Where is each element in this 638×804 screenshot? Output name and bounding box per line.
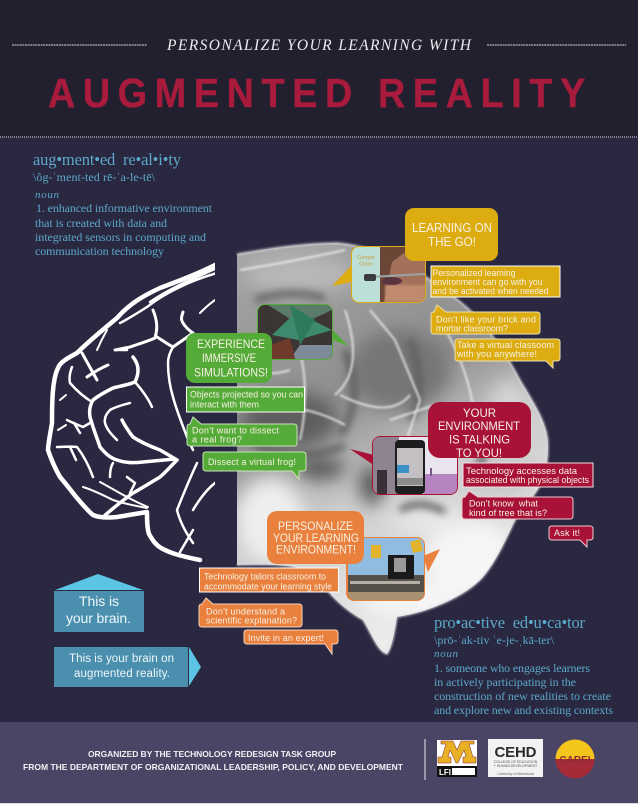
logo: University of Minnesota M: LFI bbox=[439, 768, 451, 777]
definition: proactive educator: pro•ac•tive ed•u•ca•tor bbox=[434, 613, 586, 632]
definition: augmented reality: noun bbox=[35, 189, 60, 201]
text: objects projected bbox=[186, 387, 304, 412]
definition: proactive educator: in actively participating in the bbox=[434, 675, 576, 689]
definition: augmented reality: 1. enhanced informative environment bbox=[36, 201, 213, 215]
definition: proactive educator: and explore new and existing contexts bbox=[434, 703, 613, 717]
definition: proactive educator bbox=[434, 613, 613, 717]
heading: your environment is talking to you: TO YOU! bbox=[456, 446, 502, 460]
heading: personalize your learning environment: ENVIRONMENT! bbox=[276, 542, 356, 556]
text: personalized learning: and be activated when needed bbox=[432, 286, 548, 296]
legend: this is your brain bbox=[54, 574, 144, 632]
text: personalized learning bbox=[431, 266, 560, 297]
logo: University of Minnesota M bbox=[437, 740, 477, 777]
text: objects projected: Objects projected so you can bbox=[190, 390, 303, 400]
speech bubble: virtual frog: Dissect a virtual frog! bbox=[208, 457, 296, 467]
text: personalized learning: environment can go with you bbox=[432, 277, 542, 287]
subtitle with rules: PERSONALIZE YOUR LEARNING WITH bbox=[166, 37, 472, 54]
speech bubble: ask it: Ask it! bbox=[554, 528, 580, 538]
body background bbox=[0, 137, 638, 722]
heading: learning on the go bbox=[405, 208, 498, 261]
logo: CEHD bbox=[488, 739, 543, 777]
heading: learning on the go: THE GO! bbox=[428, 235, 476, 249]
text: technology tailors classroom: accommodate your learning style bbox=[204, 582, 332, 592]
legend: this is your brain on augmented reality: This is your brain on bbox=[69, 653, 174, 665]
footer band bbox=[0, 722, 638, 804]
heading: personalize your learning environment bbox=[267, 511, 364, 564]
photographic brain bbox=[230, 235, 560, 660]
speech bubble: kind of tree: Don’t know what bbox=[469, 498, 538, 508]
heading: your environment is talking to you: IS TALKING bbox=[449, 432, 510, 446]
speech bubble: scientific explanation bbox=[199, 598, 302, 627]
heading: personalize your learning environment: YOUR LEARNING bbox=[273, 531, 359, 545]
image: virtual classroom with orange frame bbox=[346, 537, 440, 601]
heading: your environment is talking to you: YOUR bbox=[463, 406, 496, 420]
logo: CEHD: University of Minnesota bbox=[497, 772, 534, 776]
header band bbox=[0, 0, 638, 137]
image: phone with crimson frame bbox=[350, 436, 458, 495]
footer credit text bbox=[23, 749, 404, 772]
speech bubble: scientific explanation: Don’t understand a bbox=[206, 606, 285, 616]
definition: augmented reality: \ôg-ˈment-ted rē-ˈa-le-tē\ bbox=[33, 170, 156, 184]
text: technology accesses data: associated with physical objects bbox=[466, 475, 589, 485]
speech bubble: kind of tree: kind of tree that is? bbox=[469, 508, 547, 518]
heading: experience immersive simulations bbox=[186, 333, 272, 383]
legend: this is your brain: This is bbox=[79, 593, 119, 609]
definition: augmented reality: communication technology bbox=[35, 244, 164, 258]
heading: experience immersive simulations: SIMULATIONS! bbox=[194, 366, 268, 380]
speech bubble: brick and mortar: Don’t like your brick and bbox=[436, 314, 536, 324]
brain edge glow bbox=[237, 243, 548, 654]
definition: proactive educator: \prō-ˈak-tiv ˈe-je-ˌkā-ter\ bbox=[434, 633, 555, 647]
heading: experience immersive simulations: EXPERIENCE bbox=[197, 337, 265, 351]
image: Google Glass with gold frame: Glass bbox=[359, 262, 373, 268]
speech bubble: virtual frog bbox=[203, 452, 306, 479]
text: technology tailors classroom: Technology tailors classroom to bbox=[204, 572, 326, 582]
title: AUGMENTED REALITY bbox=[48, 71, 585, 116]
speech bubble: virtual classroom: Take a virtual classoom bbox=[457, 340, 554, 350]
legend: this is your brain on augmented reality bbox=[54, 647, 201, 687]
text: personalized learning: Personalized learning bbox=[432, 268, 516, 278]
definition: augmented reality: that is created with data and bbox=[35, 216, 167, 230]
logo: round seal: CAREI bbox=[559, 755, 591, 766]
heading: learning on the go: LEARNING ON bbox=[412, 221, 492, 235]
definition: augmented reality: integrated sensors in computing and bbox=[35, 230, 206, 244]
text: technology accesses data bbox=[463, 463, 593, 487]
definition: proactive educator: noun bbox=[434, 648, 458, 660]
definition: augmented reality: aug•ment•ed re•al•i•ty bbox=[33, 150, 182, 169]
speech bubble: scientific explanation: scientific explanation? bbox=[206, 616, 297, 626]
heading: experience immersive simulations: IMMERSIVE bbox=[202, 351, 256, 365]
speech bubble: virtual classroom bbox=[455, 339, 560, 368]
logo: round seal bbox=[556, 740, 594, 778]
speech bubble: ask it bbox=[549, 526, 593, 547]
speech bubble: real frog bbox=[187, 417, 297, 446]
definition: proactive educator: 1. someone who engages learners bbox=[434, 661, 590, 675]
logo: CEHD: COLLEGE OF EDUCATION bbox=[494, 760, 538, 764]
line-art brain bbox=[48, 264, 217, 560]
image: simulation with green frame bbox=[257, 304, 348, 360]
speech bubble: invite an expert bbox=[244, 630, 338, 654]
definition: augmented reality bbox=[33, 150, 213, 258]
heading: personalize your learning environment: PERSONALIZE bbox=[278, 519, 353, 533]
logo: CEHD: CEHD bbox=[494, 744, 537, 761]
footer credit text: ORGANIZED BY THE TECHNOLOGY REDESIGN TASK GROUP bbox=[88, 749, 336, 759]
image: Google Glass with gold frame bbox=[332, 246, 426, 303]
definition: proactive educator: construction of new realities to create bbox=[434, 689, 611, 703]
legend: this is your brain on augmented reality: augmented reality. bbox=[74, 668, 170, 680]
heading: your environment is talking to you bbox=[428, 402, 531, 460]
logo: CEHD: + HUMAN DEVELOPMENT bbox=[494, 764, 538, 768]
speech bubble: brick and mortar: mortar classroom? bbox=[436, 324, 508, 334]
speech bubble: brick and mortar bbox=[431, 305, 540, 334]
image: Google Glass with gold frame: Google bbox=[357, 255, 375, 261]
heading: your environment is talking to you: ENVIRONMENT bbox=[438, 419, 521, 433]
footer credit text: FROM THE DEPARTMENT OF ORGANIZATIONAL LEADERSHIP, POLICY, AND DEVELOPMENT bbox=[23, 762, 404, 772]
speech bubble: virtual classroom: with you anywhere! bbox=[456, 349, 537, 359]
speech bubble: real frog: a real frog? bbox=[192, 434, 242, 444]
text: technology tailors classroom bbox=[200, 568, 338, 592]
speech bubble: real frog: Don’t want to dissect bbox=[192, 426, 279, 436]
speech bubble: kind of tree bbox=[462, 491, 573, 519]
legend: this is your brain: your brain. bbox=[66, 610, 131, 626]
text: objects projected: interact with them bbox=[190, 400, 259, 410]
text: technology accesses data: Technology accesses data bbox=[466, 466, 577, 476]
speech bubble: invite an expert: Invite in an expert! bbox=[248, 633, 324, 643]
